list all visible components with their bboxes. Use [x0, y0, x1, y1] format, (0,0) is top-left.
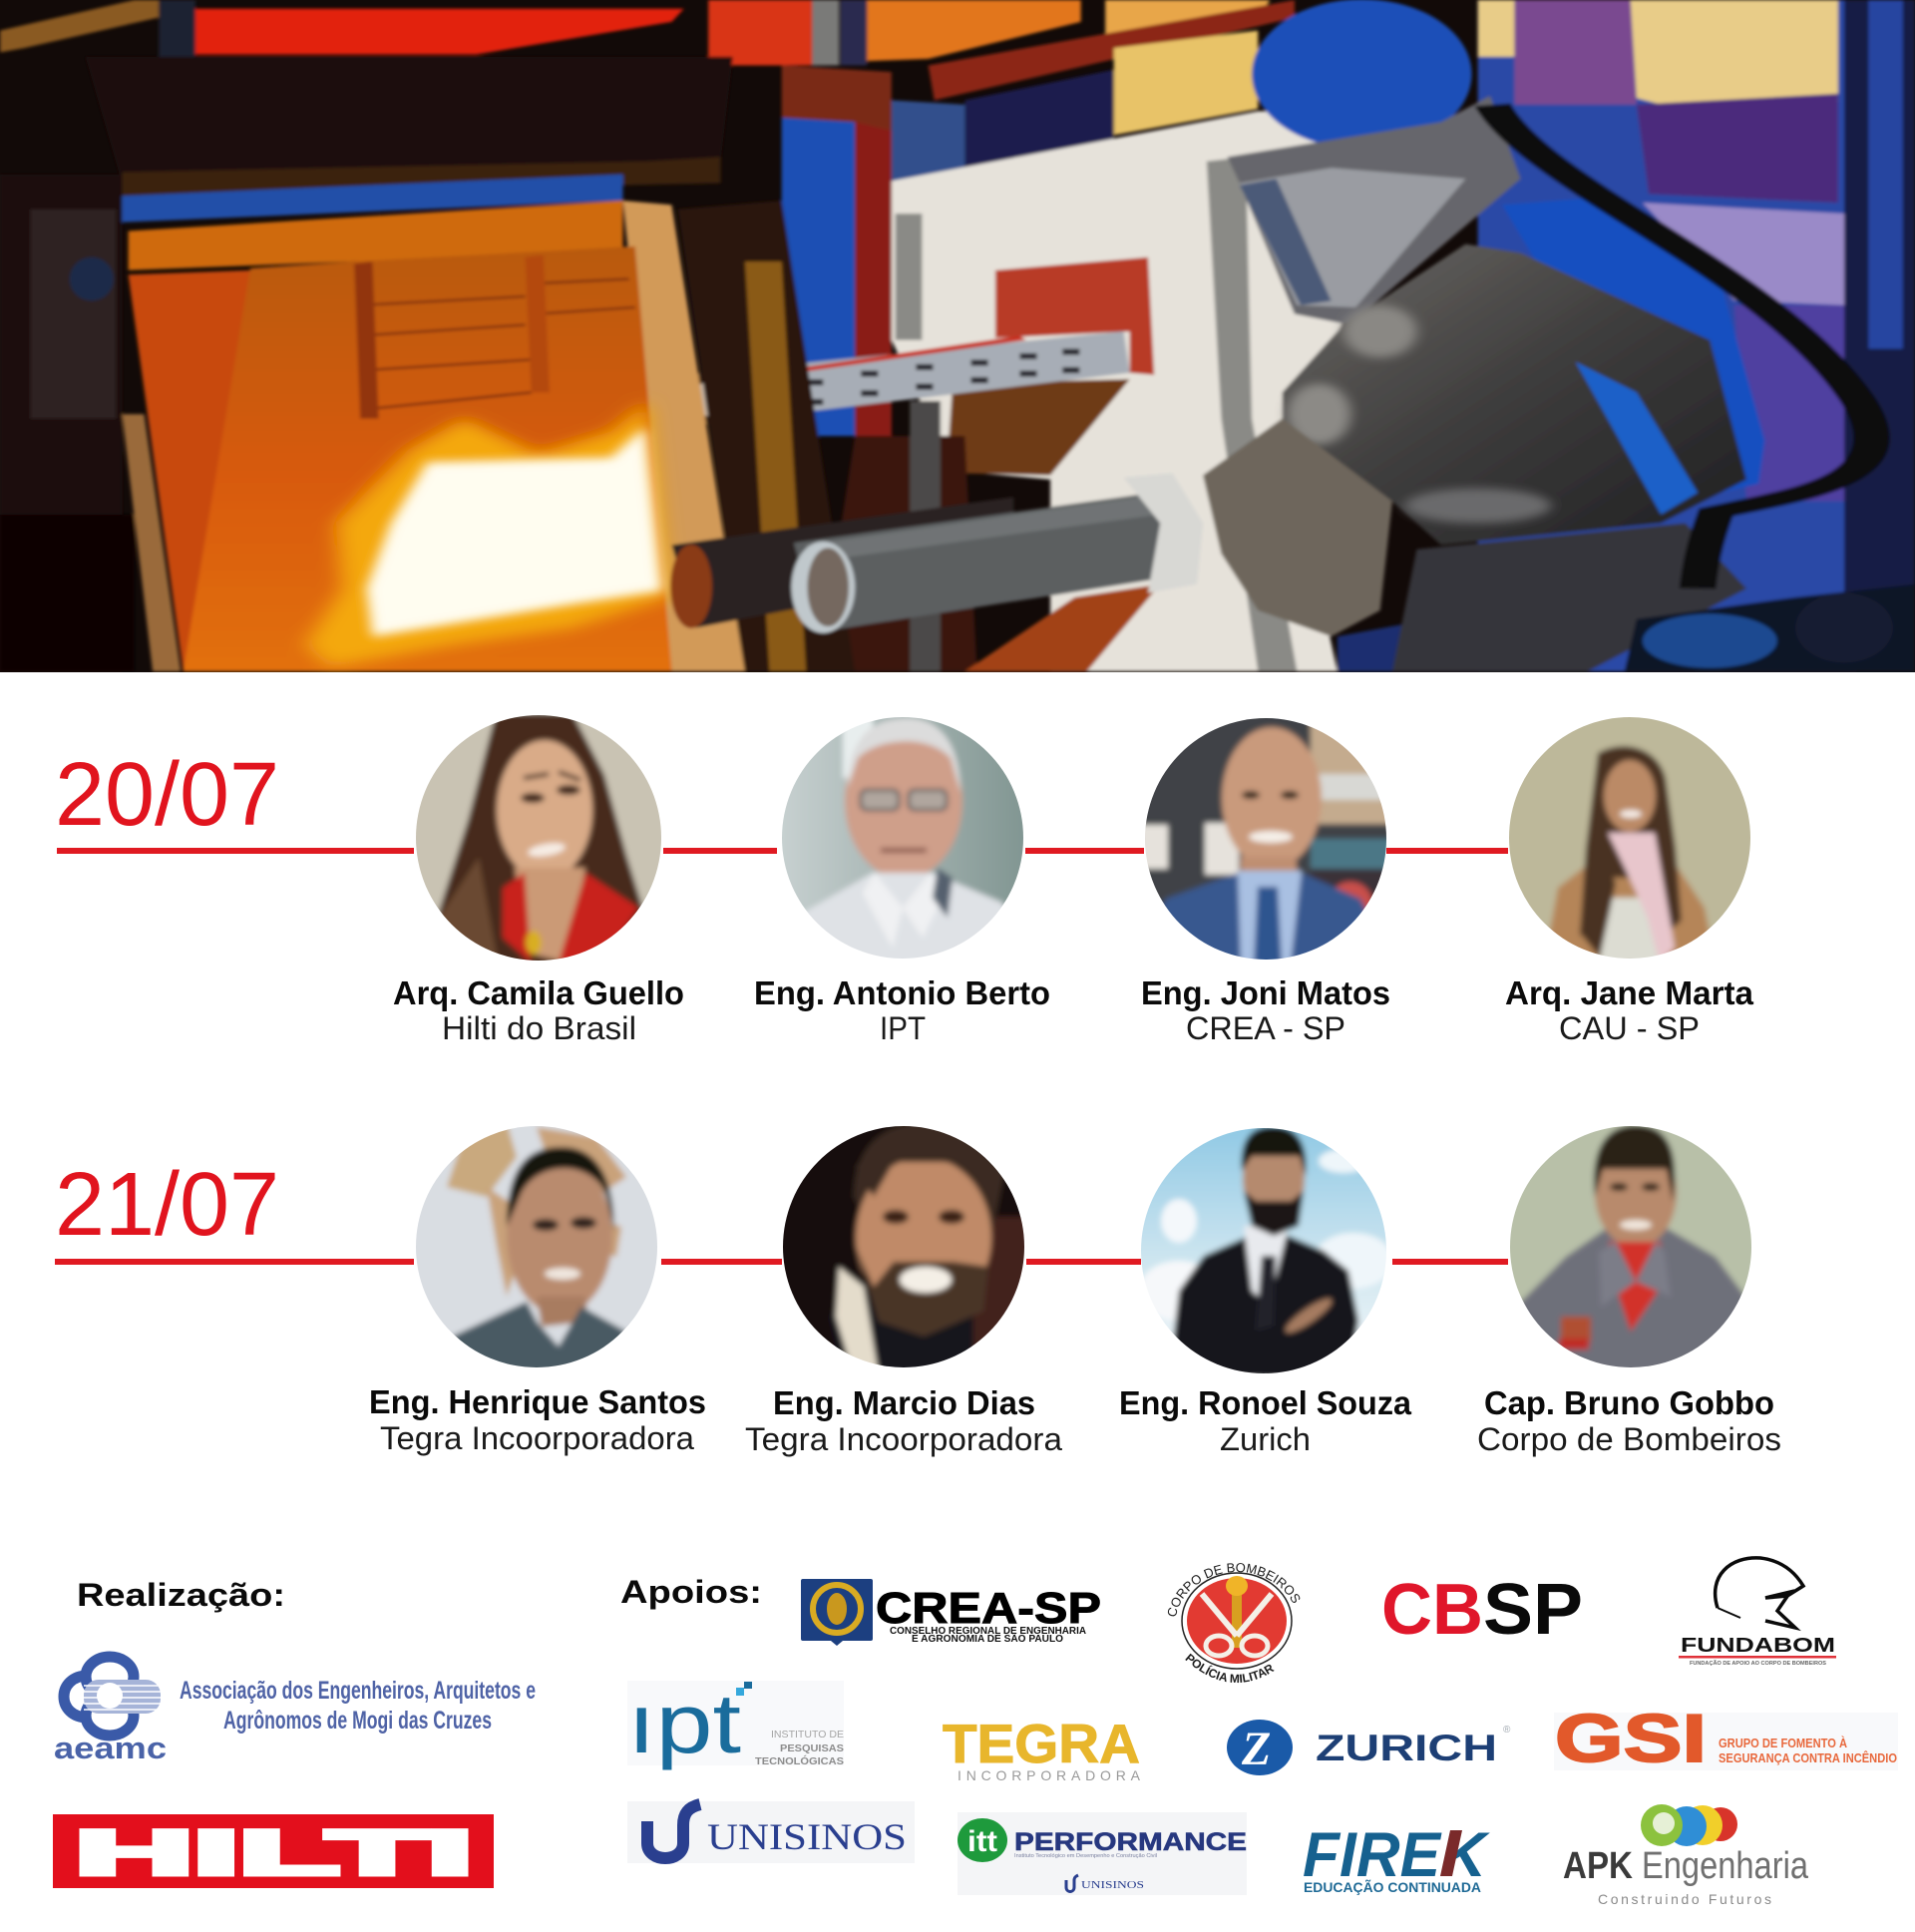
logo: Unisinos [627, 1801, 915, 1863]
speaker label: Joni Matos: Eng. Joni Matos [1141, 974, 1390, 1011]
date heading 21/07: 21/07 [55, 1155, 279, 1255]
speaker label: Antonio Berto: IPT [880, 1010, 926, 1046]
logo: Zurich: ® [1503, 1725, 1511, 1736]
logo: Zurich [1227, 1720, 1511, 1775]
speaker label: Bruno Gobbo [1477, 1384, 1781, 1457]
hero photo: fire test of pipe penetrations with technician in protective suit [0, 0, 1915, 672]
logo: Firek: EDUCAÇÃO CONTINUADA [1304, 1878, 1481, 1895]
logo: IPT: TECNOLÓGICAS [755, 1754, 844, 1767]
logo: itt Performance: itt [967, 1825, 997, 1858]
logo: GSI [1554, 1701, 1898, 1776]
logo: Tegra: TEGRA [943, 1713, 1140, 1774]
speaker label: Antonio Berto [754, 974, 1050, 1046]
logo: APK Engenharia [1563, 1804, 1809, 1907]
speaker label: Henrique Santos: Eng. Henrique Santos [369, 1383, 706, 1420]
portrait: Joni Matos [1145, 718, 1386, 960]
logo: itt Performance: UNISINOS [1081, 1879, 1144, 1891]
speaker label: Joni Matos [1141, 974, 1390, 1046]
speaker label: Ronoel Souza: Eng. Ronoel Souza [1119, 1384, 1412, 1421]
logo: IPT [627, 1677, 844, 1770]
logo: FUNDABOM: FUNDABOM [1681, 1635, 1835, 1657]
heading: Apoios: Apoios: [620, 1574, 762, 1610]
logo: Zurich: Z [1241, 1723, 1271, 1775]
logo: Corpo de Bombeiros badge [1167, 1563, 1301, 1684]
portrait: Antonio Berto [782, 717, 1023, 959]
portrait: Henrique Santos [416, 1126, 657, 1367]
logo: FUNDABOM [1679, 1558, 1836, 1667]
speaker label: Camila Guello: Hilti do Brasil [442, 1010, 636, 1046]
logo: Corpo de Bombeiros badge: CORPO DE BOMBEIROS [1167, 1563, 1301, 1616]
speaker label: Henrique Santos [369, 1383, 706, 1456]
logo: CREA-SP: CONSELHO REGIONAL DE ENGENHARIA [890, 1625, 1086, 1637]
logo: APK Engenharia: Engenharia [1642, 1845, 1809, 1887]
logo: itt Performance: Instituto Tecnológico em Desempenho e Construção Civil [1014, 1853, 1157, 1859]
logo: IPT: ıpt [627, 1677, 741, 1770]
logo: CREA-SP: CREA-SP [876, 1584, 1101, 1633]
date heading 20/07: 20/07 [55, 745, 279, 845]
logo: CREA-SP [801, 1579, 1101, 1646]
logo: itt Performance: PERFORMANCE [1014, 1828, 1247, 1856]
logo: Firek: FIRE [1303, 1820, 1442, 1890]
timeline row 1 [57, 848, 1508, 854]
speaker label: Marcio Dias: Eng. Marcio Dias [773, 1384, 1035, 1421]
logo: Unisinos: UNISINOS [707, 1817, 907, 1858]
heading: Realização: Realização: [77, 1577, 285, 1613]
portrait: Ronoel Souza [1141, 1128, 1386, 1373]
speaker label: Joni Matos: CREA - SP [1186, 1010, 1345, 1046]
logo: CREA-SP: E AGRONOMIA DE SÃO PAULO [912, 1632, 1063, 1645]
speaker label: Marcio Dias: Tegra Incoorporadora [745, 1421, 1062, 1457]
speaker label: Camila Guello: Arq. Camila Guello [393, 974, 684, 1011]
timeline row 2 [55, 1259, 1508, 1265]
speaker label: Henrique Santos: Tegra Incoorporadora [380, 1420, 694, 1456]
logo: IPT: PESQUISAS [780, 1742, 844, 1754]
speaker label: Bruno Gobbo: Cap. Bruno Gobbo [1484, 1384, 1774, 1421]
logo: CBSP: CB [1381, 1570, 1483, 1650]
logo: itt Performance [958, 1812, 1247, 1895]
logo: AEAMC: Agrônomos de Mogi das Cruzes [223, 1707, 492, 1735]
speaker label: Camila Guello [393, 974, 684, 1046]
logo: HILTI [53, 1814, 494, 1888]
speaker label: Jane Marta: CAU - SP [1559, 1010, 1700, 1046]
logo: GSI: GRUPO DE FOMENTO À [1719, 1736, 1848, 1750]
speaker label: Ronoel Souza [1119, 1384, 1412, 1457]
logo: FUNDABOM: FUNDAÇÃO DE APOIO AO CORPO DE BOMBEIROS [1690, 1660, 1826, 1667]
logo: APK Engenharia: APK [1563, 1845, 1633, 1887]
speaker label: Bruno Gobbo: Corpo de Bombeiros [1477, 1421, 1781, 1457]
speaker label: Marcio Dias [745, 1384, 1062, 1457]
logo: CBSP: SP [1483, 1570, 1583, 1650]
speaker label: Antonio Berto: Eng. Antonio Berto [754, 974, 1050, 1011]
logo: AEAMC: aeamc [54, 1731, 167, 1765]
logo: APK Engenharia: Construindo Futuros [1598, 1891, 1771, 1907]
logo: GSI: GSI [1555, 1701, 1707, 1776]
logo: CBSP [1381, 1570, 1583, 1650]
speaker label: Ronoel Souza: Zurich [1220, 1421, 1311, 1457]
logo: AEAMC: Associação dos Engenheiros, Arquitetos e [180, 1677, 536, 1705]
portrait: Bruno Gobbo [1510, 1126, 1751, 1367]
logo: Tegra: INCORPORADORA [958, 1767, 1141, 1783]
portrait: Marcio Dias [783, 1126, 1024, 1367]
logo: AEAMC [54, 1657, 536, 1765]
logo: Corpo de Bombeiros badge: POLÍCIA MILITAR [1185, 1654, 1275, 1684]
logo: Firek: K [1440, 1820, 1491, 1890]
speaker label: Jane Marta: Arq. Jane Marta [1505, 974, 1754, 1011]
portrait: Jane Marta [1509, 717, 1750, 959]
logo: IPT: INSTITUTO DE [771, 1729, 844, 1740]
logo: Zurich: ZURICH [1316, 1728, 1497, 1768]
portrait: Camila Guello [416, 715, 661, 961]
logo: HILTI: HILTI [75, 1818, 473, 1888]
speaker label: Jane Marta [1505, 974, 1754, 1046]
